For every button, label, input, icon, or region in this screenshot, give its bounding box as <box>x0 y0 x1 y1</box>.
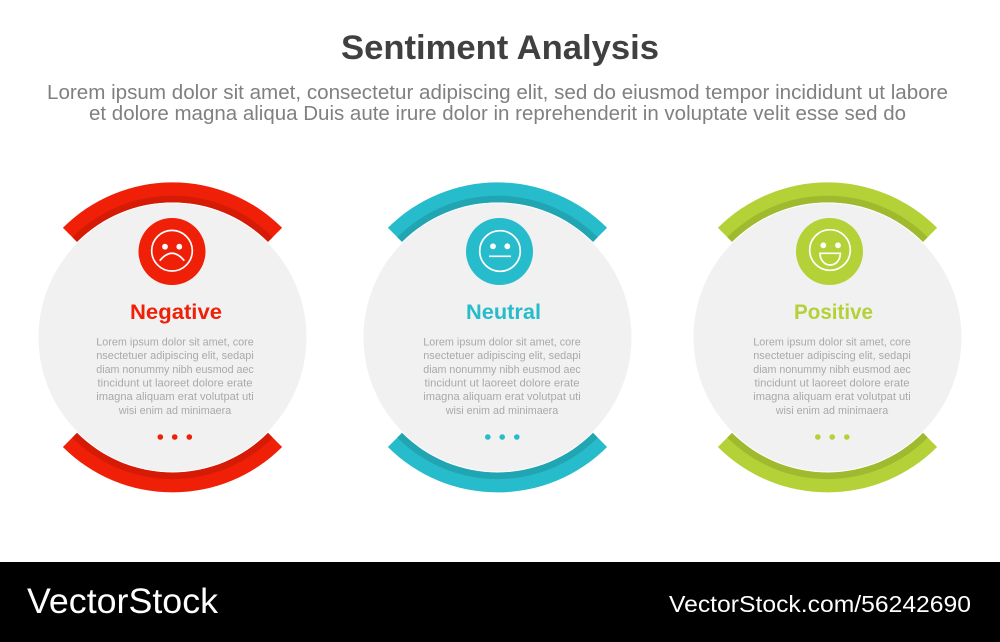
text block: positive: Lorem ipsum dolor sit amet, core <box>753 336 911 348</box>
text block: negative: nsectetuer adipiscing elit, sedapi <box>96 350 254 362</box>
panel: neutral <box>364 182 632 492</box>
text block: negative: Lorem ipsum dolor sit amet, core <box>96 336 254 348</box>
subtitle: et dolore magna aliqua Duis aute irure dolor in reprehenderit in voluptate velit esse sed do <box>89 103 906 125</box>
icon: neutral face <box>466 218 533 285</box>
text block: positive: imagna aliquam erat volutpat uti <box>753 391 911 403</box>
text block: neutral: tincidunt ut laoreet dolore erate <box>424 378 580 390</box>
label: negative: Negative <box>130 301 222 324</box>
arcs and circle: neutral <box>364 182 632 492</box>
text block: negative: diam nonummy nibh eusmod aec <box>96 364 254 376</box>
text block: neutral: diam nonummy nibh eusmod aec <box>423 364 581 376</box>
watermark bar <box>0 562 1000 642</box>
text block: negative: imagna aliquam erat volutpat uti <box>96 391 254 403</box>
panel: positive <box>694 182 962 492</box>
watermark logo text: VectorStock <box>27 582 219 621</box>
text block: negative <box>96 336 254 417</box>
arcs and circle: positive <box>694 182 962 492</box>
text block: positive <box>753 336 911 417</box>
label: positive: Positive <box>794 301 873 324</box>
text block: neutral <box>423 336 581 417</box>
title: Sentiment Analysis <box>341 29 659 67</box>
panel: negative <box>38 182 306 492</box>
text block: neutral: Lorem ipsum dolor sit amet, core <box>423 336 581 348</box>
text block: neutral: nsectetuer adipiscing elit, sedapi <box>423 350 581 362</box>
dots: positive <box>815 434 850 440</box>
subtitle <box>47 82 948 125</box>
text block: positive: diam nonummy nibh eusmod aec <box>753 364 911 376</box>
text block: positive: tincidunt ut laoreet dolore erate <box>754 378 910 390</box>
text block: neutral: wisi enim ad minimaera <box>445 405 559 417</box>
watermark url: VectorStock.com/56242690 <box>669 591 971 617</box>
text block: positive: nsectetuer adipiscing elit, sedapi <box>753 350 911 362</box>
text block: negative: wisi enim ad minimaera <box>118 405 232 417</box>
icon: sad face <box>138 218 206 285</box>
label: neutral: Neutral <box>466 301 541 324</box>
dots: negative <box>158 434 192 440</box>
arcs and circle: negative <box>38 182 306 492</box>
text block: negative: tincidunt ut laoreet dolore erate <box>98 378 252 390</box>
dots: neutral <box>485 434 520 440</box>
text block: positive: wisi enim ad minimaera <box>775 405 889 417</box>
subtitle: Lorem ipsum dolor sit amet, consectetur adipiscing elit, sed do eiusmod tempor incididunt ut labore <box>47 82 948 104</box>
text block: neutral: imagna aliquam erat volutpat uti <box>423 391 581 403</box>
icon: happy face <box>796 218 863 285</box>
